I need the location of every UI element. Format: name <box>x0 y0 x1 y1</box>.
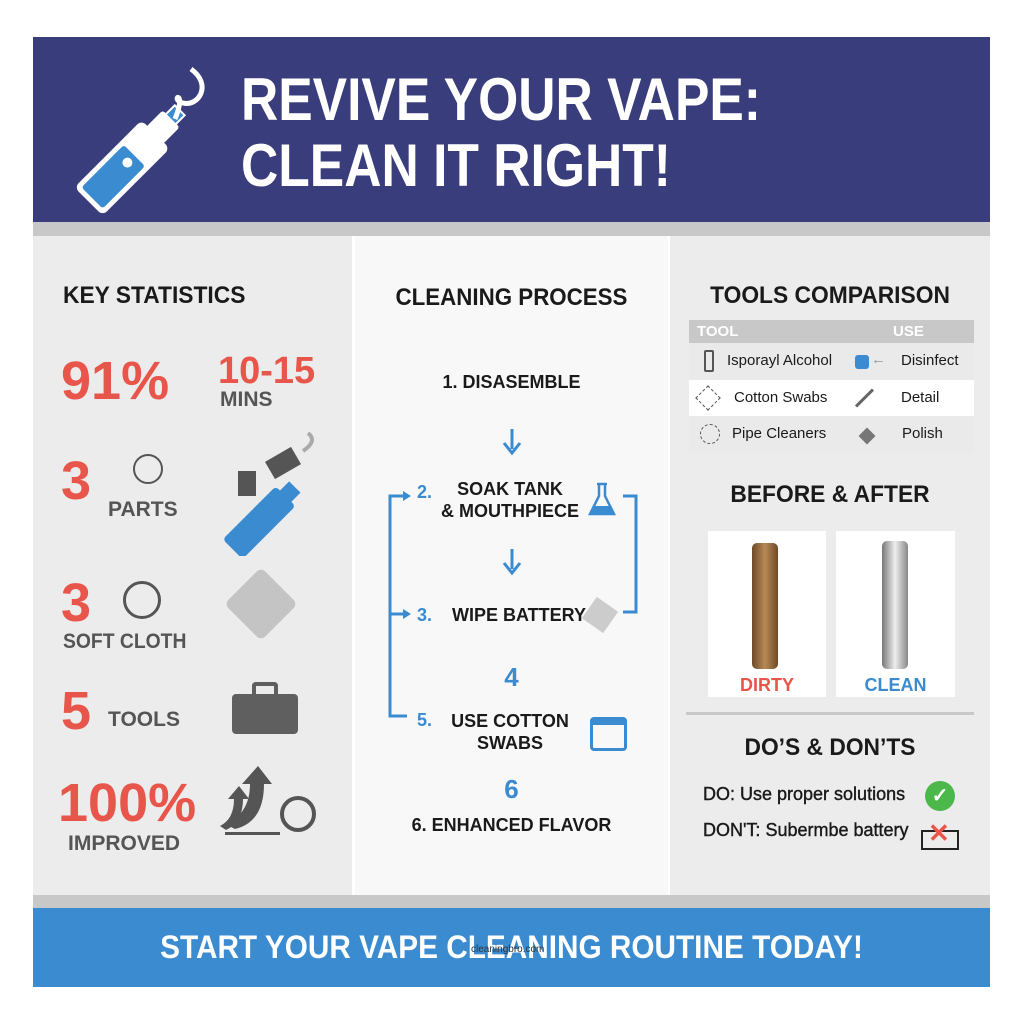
step 6: 6. ENHANCED FLAVOR <box>412 815 611 835</box>
panel: cleaning process: SOAK TANK <box>457 479 563 499</box>
table: Polish <box>902 425 943 442</box>
table: Pipe Cleaners <box>732 425 826 442</box>
icon: flask <box>588 482 616 516</box>
brackets <box>388 491 638 718</box>
icon: calendar <box>590 717 627 751</box>
table: Disinfect <box>901 352 959 369</box>
title: CLEAN IT RIGHT! <box>241 132 671 199</box>
stat 3 soft cloth: 3 <box>61 573 91 633</box>
panel: key statistics: TOOLS <box>108 708 180 731</box>
panel: key statistics: SOFT CLOTH <box>63 630 186 653</box>
panel: key statistics <box>33 236 352 895</box>
icon: battery cross <box>921 830 959 850</box>
stat 5 tools: 5 <box>61 681 91 741</box>
footer call to action: START YOUR VAPE CLEANING ROUTINE TODAY! <box>160 929 863 965</box>
table <box>689 320 974 444</box>
dont line: DON'T: Subermbe battery <box>703 820 909 840</box>
card: dirty: DIRTY <box>740 675 794 695</box>
stat 100% improved: 100% <box>58 773 196 833</box>
step 6 number: 6 <box>504 774 519 804</box>
panel: key statistics: PARTS <box>108 498 178 521</box>
heading: CLEANING PROCESS <box>396 284 627 311</box>
footer call to action <box>33 908 990 987</box>
card: clean <box>836 531 955 697</box>
icon: battery cross: ✕ <box>928 818 950 848</box>
icon: arrows up <box>220 766 316 835</box>
icon: gauge <box>123 581 161 619</box>
icon: clock <box>133 454 163 484</box>
step 2: 2. <box>417 482 432 502</box>
panel: key statistics: IMPROVED <box>68 832 180 855</box>
panel: cleaning process: WIPE BATTERY <box>452 605 586 625</box>
icon: cloth wipe <box>582 597 618 633</box>
stat 91%: 91% <box>61 351 169 411</box>
stat 10-15 mins: 10-15 <box>218 350 315 392</box>
panel: cleaning process <box>355 236 668 895</box>
icon: vape pen <box>76 67 205 214</box>
arrow <box>502 549 522 576</box>
table: ← <box>871 351 886 368</box>
panel: cleaning process: USE COTTON <box>451 711 569 731</box>
step 3: 3. <box>417 605 432 625</box>
heading: KEY STATISTICS <box>63 282 245 309</box>
footer call to action: cleaningbro.com <box>471 944 544 955</box>
icon: cloth <box>224 567 298 641</box>
table: Isporayl Alcohol <box>727 352 832 369</box>
icon: check: ✓ <box>932 785 948 807</box>
icon: vape parts <box>224 432 314 556</box>
heading: TOOLS COMPARISON <box>710 282 950 309</box>
icon: check <box>925 781 955 811</box>
card: dirty <box>708 531 826 697</box>
stat 3 parts: 3 <box>61 451 91 511</box>
icon: toolbox <box>232 694 298 734</box>
header banner <box>33 37 990 222</box>
step 5: 5. <box>417 710 432 730</box>
heading: do's & don'ts: DO’S & DON’TS <box>744 734 916 761</box>
panel: cleaning process: & MOUTHPIECE <box>441 501 579 521</box>
table: TOOL <box>697 323 738 340</box>
arrow <box>502 429 522 456</box>
title <box>241 66 761 199</box>
table: USE <box>893 323 924 340</box>
card: clean: CLEAN <box>864 675 926 695</box>
panel: key statistics: MINS <box>220 388 272 411</box>
do line: DO: Use proper solutions <box>703 784 905 804</box>
panel: tools & do's <box>670 236 990 895</box>
table: Detail <box>901 389 939 406</box>
table: Cotton Swabs <box>734 389 827 406</box>
title: REVIVE YOUR VAPE: <box>241 66 761 133</box>
step 4: 4 <box>504 662 519 692</box>
heading: before & after: BEFORE & AFTER <box>730 481 930 508</box>
panel: cleaning process: SWABS <box>477 733 543 753</box>
step 1: 1. DISASEMBLE <box>442 372 581 392</box>
